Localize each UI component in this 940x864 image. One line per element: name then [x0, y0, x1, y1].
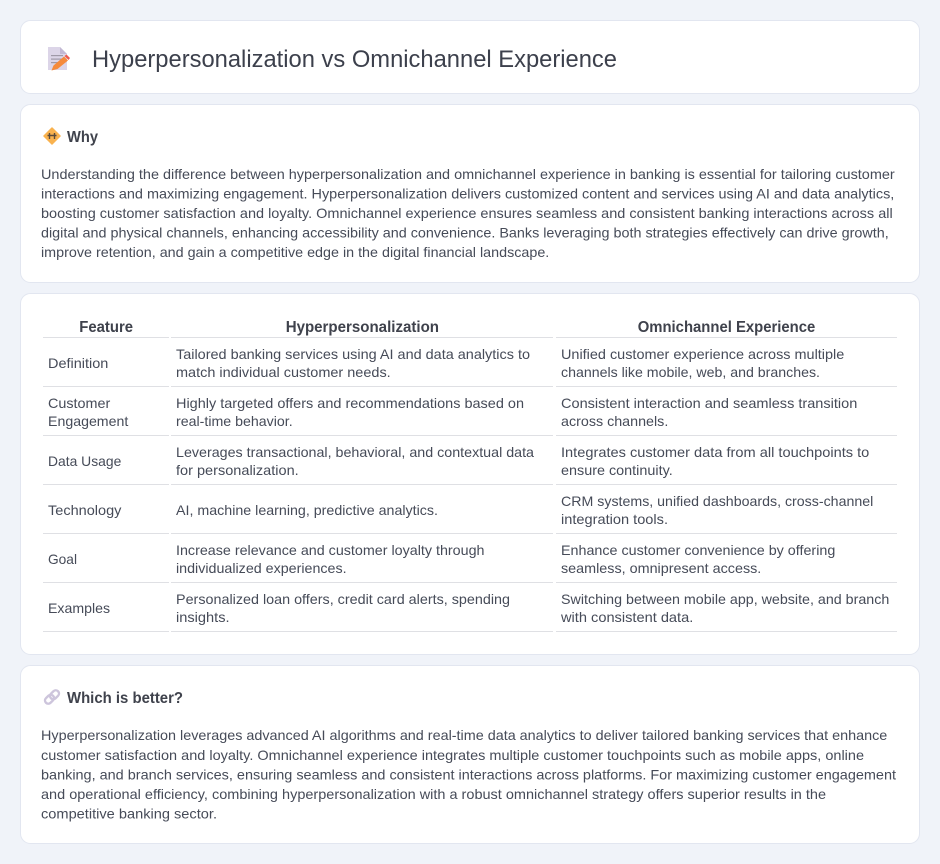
icon: orange diamond: [44, 128, 60, 144]
text block: why paragraph: improve retention, and gain a competitive edge in the digital financial landscape.: [41, 244, 549, 260]
table header row: [43, 319, 897, 338]
table row: goal: seamless, omnipresent access.: [561, 560, 761, 576]
text block: which is better paragraph: [41, 727, 896, 822]
table row: technology: AI, machine learning, predictive analytics.: [176, 502, 438, 518]
text block: which is better paragraph: Hyperpersonalization leverages advanced AI algorithms and real-time data analytics to deliver tailored banking services that enhance: [41, 727, 888, 743]
table row: goal: [43, 542, 897, 583]
panel: which is better: [20, 666, 920, 844]
table row: data usage: for personalization.: [176, 462, 299, 478]
heading: why: Why: [67, 129, 98, 146]
table row: definition: match individual customer needs.: [176, 364, 391, 380]
icon: chain link: [44, 689, 60, 705]
text block: which is better paragraph: and operational efficiency, combining hyperpersonalization with a robust omnichannel strategy offers superior results in the: [41, 786, 826, 802]
table row: data usage: Leverages transactional, behavioral, and contextual data: [176, 444, 534, 460]
table header row: Hyperpersonalization: [286, 319, 439, 336]
table row: definition: channels like mobile, web, and branches.: [561, 364, 820, 380]
table row: definition: Tailored banking services using AI and data analytics to: [176, 346, 530, 362]
panel: header: [20, 20, 920, 94]
table row: data usage: ensure continuity.: [561, 462, 673, 478]
table row: goal: Enhance customer convenience by offering: [561, 542, 835, 558]
table row: technology: [43, 493, 897, 534]
table row: goal: individualized experiences.: [176, 560, 347, 576]
table row: customer engagement: Consistent interaction and seamless transition: [561, 395, 857, 411]
table row: examples: with consistent data.: [560, 609, 693, 625]
table row: examples: [43, 591, 897, 632]
table header row: Feature: [79, 319, 133, 336]
table row: examples: insights.: [176, 609, 230, 625]
table row: goal: Goal: [48, 551, 77, 567]
text block: which is better paragraph: competitive banking sector.: [41, 806, 217, 822]
table row: customer engagement: across channels.: [561, 413, 668, 429]
title: Hyperpersonalization vs Omnichannel Experience: [92, 46, 617, 73]
table row: technology: CRM systems, unified dashboards, cross-channel: [561, 493, 873, 509]
table row: customer engagement: Highly targeted offers and recommendations based on: [176, 395, 524, 411]
table row: technology: integration tools.: [561, 511, 668, 527]
text block: why paragraph: digital and physical channels, enhancing accessibility and convenience. Banks leveraging both strategies effectively can drive growth,: [41, 224, 889, 240]
table row: customer engagement: Engagement: [48, 413, 128, 429]
table row: definition: [43, 346, 897, 387]
table row: customer engagement: [43, 395, 897, 436]
panel: comparison table: [20, 294, 920, 654]
text block: why paragraph: Understanding the difference between hyperpersonalization and omnichannel experience in banking is essential for tailoring customer: [41, 166, 895, 182]
text block: why paragraph: [41, 166, 895, 260]
table row: data usage: [43, 444, 897, 485]
table row: customer engagement: real-time behavior.: [176, 413, 293, 429]
heading: which is better: Which is better?: [67, 690, 183, 707]
text block: which is better paragraph: banking, and branch services, ensuring seamless and consistent interactions across platforms. For maximizing customer engagement: [41, 766, 896, 782]
table row: examples: Examples: [48, 600, 110, 616]
panel: why: [20, 104, 920, 282]
table row: definition: Definition: [48, 355, 108, 371]
table row: examples: Switching between mobile app, website, and branch: [561, 591, 889, 607]
table header row: Omnichannel Experience: [638, 319, 815, 336]
text block: which is better paragraph: customer satisfaction and loyalty. Omnichannel experience integrates multiple customer touchpoints such as mobile apps, online: [41, 747, 864, 763]
table row: data usage: Integrates customer data from all touchpoints to: [561, 444, 870, 460]
table row: definition: Unified customer experience across multiple: [561, 346, 845, 362]
table row: goal: Increase relevance and customer loyalty through: [176, 542, 484, 558]
icon: document with pencil: [48, 47, 70, 70]
table row: technology: Technology: [48, 502, 121, 518]
text block: why paragraph: boosting customer satisfaction and loyalty. Omnichannel experience ensures seamless and consistent banking interactions across all: [41, 205, 893, 221]
table row: customer engagement: Customer: [48, 395, 111, 411]
table row: examples: Personalized loan offers, credit card alerts, spending: [176, 591, 510, 607]
text block: why paragraph: interactions and maximizing engagement. Hyperpersonalization delivers customized content and services using AI and data analytics,: [41, 186, 894, 202]
table row: data usage: Data Usage: [48, 453, 122, 469]
